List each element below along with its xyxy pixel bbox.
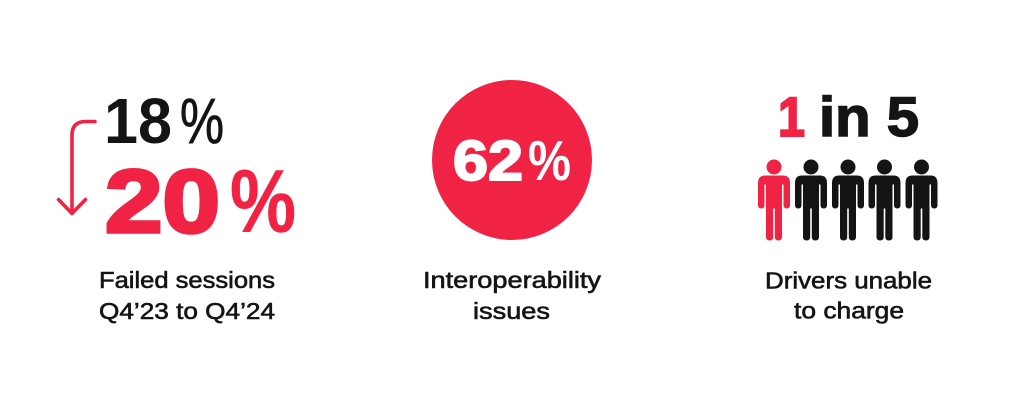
stat: 62%: % (528, 129, 571, 193)
stat: 62%: 62 (453, 129, 523, 193)
label: drivers unable to charge: to charge (794, 298, 904, 324)
icon: black person 1 (795, 160, 827, 240)
stat: 20%: 20 (105, 151, 220, 251)
icon: people row (758, 160, 938, 240)
circle badge (432, 80, 592, 240)
panel: interoperability (423, 80, 602, 324)
icon: red person (758, 160, 790, 240)
panel: failed sessions (58, 85, 296, 324)
label: failed sessions: Q4’23 to Q4’24 (99, 298, 275, 324)
icon: black person 2 (832, 160, 864, 240)
stat: 20%: % (230, 151, 296, 251)
label: interoperability issues: issues (473, 298, 550, 324)
arrow: down from 18% to 20% (58, 122, 95, 214)
stat: 1 in 5: in 5 (819, 85, 919, 148)
label: drivers unable to charge: Drivers unable (765, 268, 932, 294)
stat: 1 in 5: 1 (778, 85, 805, 148)
stat: 18%: 18 (104, 85, 172, 157)
label: interoperability issues: Interoperability (423, 267, 602, 293)
panel: drivers unable to charge (758, 85, 938, 324)
icon: black person 3 (868, 160, 900, 240)
icon: black person 4 (906, 160, 938, 240)
label: failed sessions: Failed sessions (99, 267, 275, 293)
stat: 18%: % (180, 85, 224, 157)
